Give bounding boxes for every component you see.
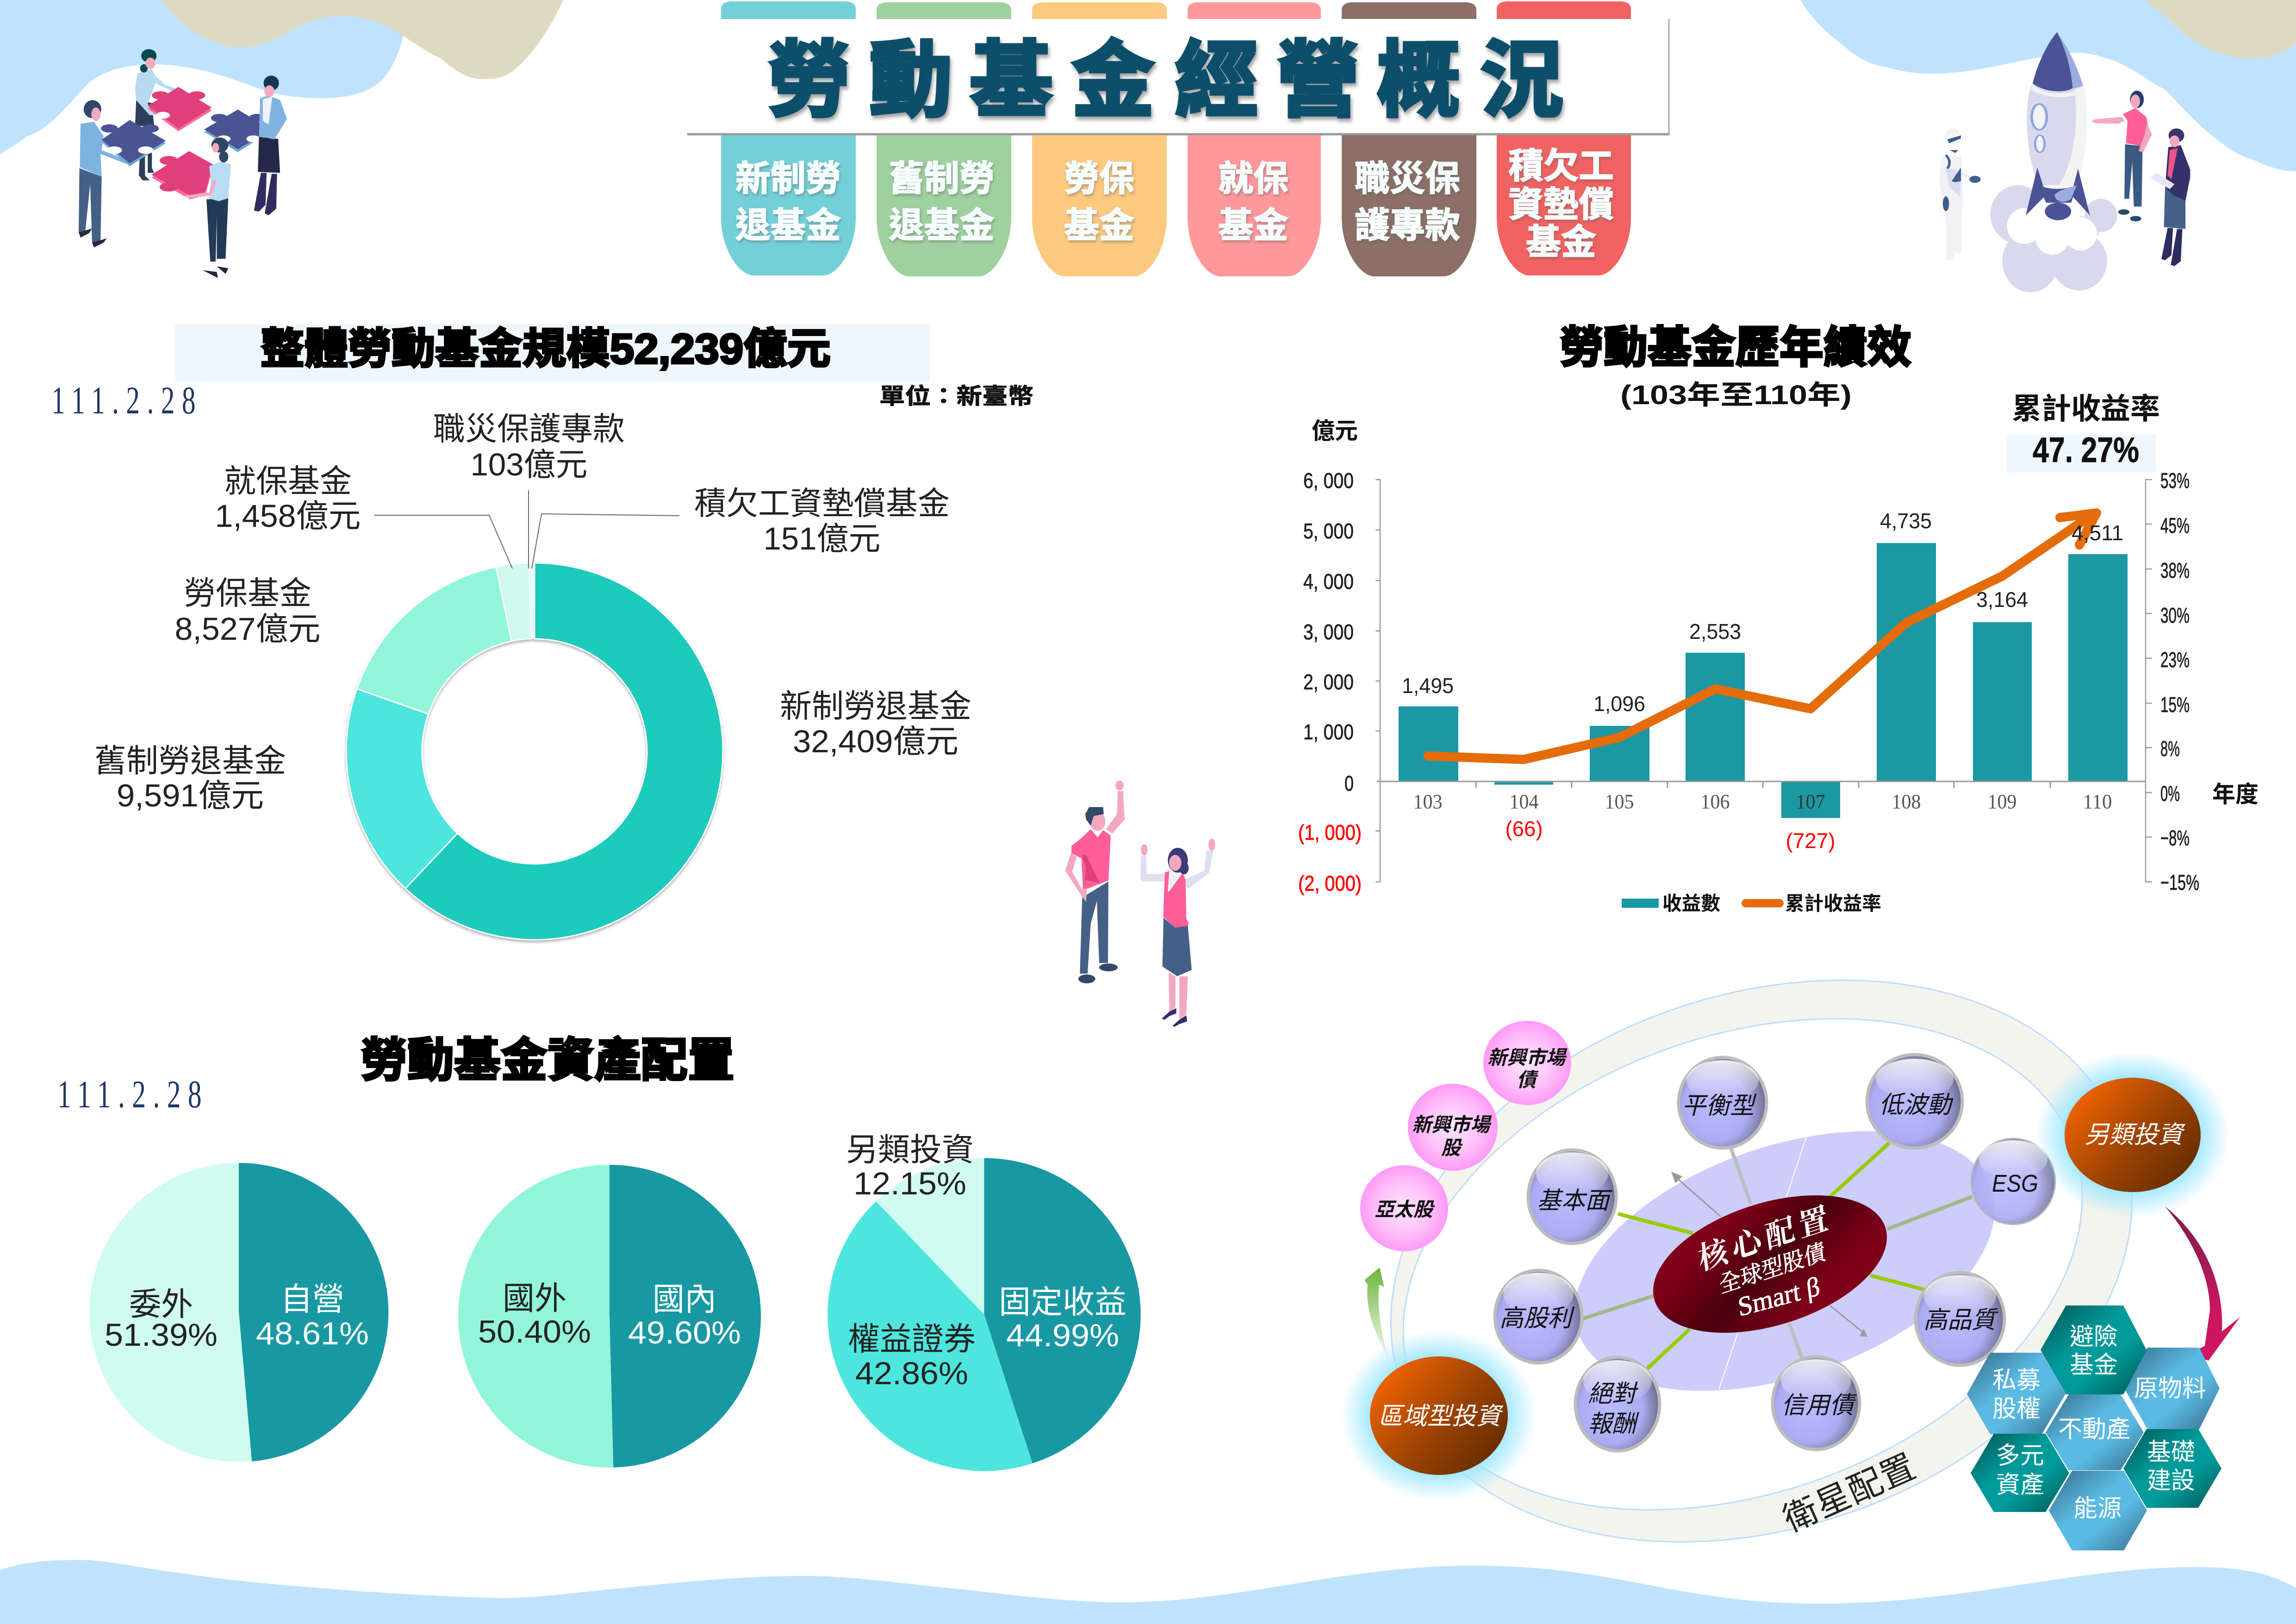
node: 另類投資 (2035, 1051, 2230, 1218)
pie: asset class: 12.15% (853, 1166, 966, 1201)
hex: 基礎建設 (2123, 1429, 2221, 1508)
right axis labels: 53% (2160, 468, 2190, 493)
header: top colour tabs (721, 1, 1631, 19)
label: 積欠工資墊償基金 (694, 486, 950, 556)
year labels: 103 (1413, 790, 1442, 813)
bubble: 高股利: 高股利 (1500, 1305, 1575, 1332)
label: 新制勞退基金: 32,409億元 (793, 724, 958, 759)
right axis labels: 23% (2160, 648, 2190, 672)
bubble: 絕對報酬: 絕對 (1588, 1380, 1639, 1407)
bubble: ESG: ESG (1992, 1170, 2038, 1197)
legend (1622, 893, 1881, 914)
label: 職災保護專款 (433, 411, 625, 482)
value labels: 4,735 (1880, 509, 1932, 533)
label: 積欠工資墊償基金: 積欠工資墊償基金 (694, 486, 950, 521)
hex: 不動產: 不動產 (2058, 1416, 2130, 1443)
hex: 私募股權: 私募 (1992, 1367, 2041, 1394)
year labels: 104 (1510, 790, 1538, 813)
cumulative return value: 47. 27% (2033, 431, 2139, 470)
year labels (1413, 790, 2112, 813)
left axis labels: 5, 000 (1303, 519, 1354, 543)
hex: 避險基金: 基金 (2070, 1352, 2118, 1379)
satellite ring (1315, 885, 2208, 1624)
date: 111.2.28 (57, 1073, 209, 1116)
bubble: 絕對報酬: 報酬 (1588, 1411, 1639, 1437)
hex: 避險基金 (2041, 1305, 2147, 1394)
date: 111.2.28 (51, 379, 203, 422)
label: 積欠工資墊償基金: 151億元 (764, 521, 880, 556)
left axis labels: 6, 000 (1303, 468, 1354, 493)
label: 職災保護專款: 103億元 (470, 447, 588, 482)
satellite hexagon cluster (1967, 1305, 2221, 1550)
right axis labels (2160, 468, 2199, 894)
pie: management: 自營 (280, 1281, 344, 1317)
chart heading: 勞動基金歷年績效 (1560, 323, 1911, 372)
regional: 亞太股 (1360, 1165, 1448, 1251)
legend: 累計收益率 (1785, 893, 1881, 914)
panel: asset allocation (57, 1035, 1141, 1471)
right axis labels: 38% (2160, 558, 2190, 582)
bubble: 平衡型 (1679, 1057, 1767, 1148)
core ellipse: 全球型股債 (1718, 1239, 1829, 1298)
fund tab: 新制勞退基金 (721, 135, 856, 275)
arrow: green up (1364, 1268, 1391, 1364)
panel heading: 整體勞動基金規模52,239億元 (261, 325, 831, 373)
fund tab: 積欠工資墊償基金: 資墊償 (1508, 185, 1614, 225)
pie: asset class (828, 1132, 1141, 1471)
ring label: 衛星配置 (1778, 1447, 1922, 1539)
fund tab: 就保基金 (1188, 135, 1321, 276)
left axis labels (1298, 468, 1362, 895)
fund tab: 舊制勞退基金: 退基金 (889, 206, 995, 245)
fund tab: 職災保護專款: 護專款 (1355, 206, 1460, 245)
illustration: two people cheering (1065, 781, 1215, 1027)
bubble: 低波動: 低波動 (1879, 1092, 1954, 1118)
hex: 基礎建設: 基礎 (2147, 1439, 2195, 1466)
value labels (1402, 509, 2123, 853)
year labels: 105 (1605, 790, 1634, 813)
small arrows (1671, 1172, 1867, 1337)
pie: management: 委外 (129, 1287, 193, 1322)
background: bottom wave (0, 1560, 2296, 1624)
label: 勞保基金: 8,527億元 (175, 611, 320, 647)
zero line (1377, 781, 2146, 788)
label: 勞保基金: 勞保基金 (184, 575, 311, 611)
hex: 能源: 能源 (2073, 1495, 2122, 1522)
bars (1399, 543, 2128, 818)
left axis labels: 3, 000 (1303, 620, 1354, 644)
panel: yearly performance (1298, 323, 2259, 914)
background: top left blobs (0, 0, 563, 154)
node: 區域型投資: 區域型投資 (1378, 1403, 1504, 1430)
bubble: 高品質: 高品質 (1923, 1307, 1999, 1334)
x axis title: 年度 (2212, 781, 2259, 807)
regional: 新興市場股: 股 (1441, 1137, 1463, 1159)
regional: 新興市場債: 債 (1517, 1069, 1539, 1091)
hex: 基礎建設: 建設 (2147, 1468, 2195, 1494)
connectors (1580, 1137, 1972, 1389)
pie: management (89, 1163, 388, 1462)
node: 區域型投資 (1341, 1330, 1537, 1501)
label: 新制勞退基金: 新制勞退基金 (780, 688, 971, 724)
legend: 收益數 (1662, 893, 1720, 914)
hex: 私募股權: 股權 (1992, 1396, 2041, 1423)
right axis labels: 8% (2160, 737, 2180, 761)
bubble: 高品質 (1916, 1273, 2004, 1365)
value labels: 3,164 (1976, 587, 2028, 612)
pie: region: 50.40% (478, 1314, 591, 1349)
cumulative return label: 累計收益率 (2012, 392, 2160, 425)
bubble: 平衡型: 平衡型 (1682, 1093, 1757, 1119)
pie: region (458, 1165, 761, 1468)
left axis labels: (2, 000) (1298, 871, 1362, 895)
bubble: 基本面: 基本面 (1537, 1187, 1613, 1214)
label: 勞保基金 (175, 575, 320, 647)
label: 舊制勞退基金 (94, 743, 286, 813)
value labels: 1,096 (1593, 692, 1645, 716)
year labels: 109 (1987, 790, 2017, 813)
cumulative return line with arrow (1428, 513, 2097, 759)
bubble: 高股利 (1495, 1270, 1582, 1363)
label: 舊制勞退基金: 舊制勞退基金 (94, 743, 286, 779)
illustration: rocket with robot and people (1939, 32, 2190, 292)
pie: management: 51.39% (105, 1317, 218, 1353)
pie: asset class: 44.99% (1006, 1318, 1119, 1353)
illustration: team with puzzle pieces (79, 49, 287, 278)
label: 就保基金: 就保基金 (224, 463, 352, 499)
pie: region: 49.60% (628, 1315, 741, 1350)
core ellipse: 核心配置 (1696, 1200, 1835, 1277)
pie: asset class: 42.86% (855, 1355, 968, 1391)
pie: asset class: 權益證券 (848, 1321, 976, 1357)
fund tab: 就保基金: 就保 (1218, 159, 1288, 199)
hex: 原物料 (2124, 1348, 2220, 1429)
pie: asset class: 固定收益 (999, 1284, 1126, 1320)
fund tab: 就保基金: 基金 (1218, 206, 1288, 245)
core ellipse (1636, 1169, 1904, 1359)
left axis labels: (1, 000) (1298, 820, 1362, 844)
right axis labels: −15% (2160, 870, 2199, 894)
fund tab: 勞保基金: 基金 (1064, 206, 1134, 245)
bubble: 信用債 (1773, 1357, 1860, 1449)
value labels: 4,511 (2072, 521, 2123, 545)
core ellipse: Smart β (1736, 1271, 1822, 1323)
regional: 新興市場債: 新興市場 (1487, 1047, 1568, 1068)
value labels: 2,553 (1689, 619, 1741, 643)
left axis labels: 1, 000 (1303, 720, 1354, 744)
panel: fund size (51, 324, 1033, 940)
year labels: 106 (1700, 790, 1730, 813)
bubble: 基本面 (1528, 1150, 1616, 1243)
pie: region: 國外 (503, 1280, 566, 1316)
left axis labels: 4, 000 (1303, 569, 1354, 593)
arrow: magenta down (2165, 1206, 2240, 1361)
fund tab: 舊制勞退基金: 舊制勞 (889, 159, 995, 199)
label: 就保基金: 1,458億元 (215, 498, 361, 534)
node: 另類投資: 另類投資 (2084, 1121, 2186, 1149)
right axis labels: 0% (2160, 781, 2180, 806)
regional: 亞太股: 亞太股 (1375, 1199, 1435, 1220)
donut chart (346, 563, 723, 940)
fund tab: 積欠工資墊償基金 (1497, 135, 1631, 275)
left unit: 億元 (1312, 418, 1358, 444)
right axis labels: 30% (2160, 603, 2190, 627)
value labels: (66) (1505, 817, 1543, 841)
panel heading box (175, 324, 930, 382)
label: 新制勞退基金 (780, 688, 971, 759)
hex: 原物料: 原物料 (2134, 1375, 2206, 1402)
fund tab: 勞保基金: 勞保 (1064, 159, 1134, 199)
fund tab: 積欠工資墊償基金: 基金 (1526, 223, 1596, 262)
hex: 多元資產: 資產 (1996, 1472, 2044, 1499)
title: 勞動基金經營概況 (767, 34, 1563, 127)
year labels: 110 (2083, 790, 2112, 813)
pie: management: 48.61% (256, 1316, 369, 1351)
leader lines (374, 490, 679, 568)
regional: 新興市場股: 新興市場 (1412, 1114, 1492, 1136)
value labels: 1,495 (1402, 674, 1454, 698)
left axis labels: 2, 000 (1303, 670, 1354, 694)
label: 職災保護專款: 職災保護專款 (433, 411, 625, 447)
regional: 新興市場債 (1483, 1021, 1571, 1105)
background: top right blobs (1800, 0, 2296, 171)
diagram: core satellite allocation (1315, 885, 2240, 1624)
hex: 不動產 (2046, 1394, 2144, 1470)
year labels: 108 (1892, 790, 1921, 813)
fund tab: 新制勞退基金: 新制勞 (735, 159, 841, 199)
fund tab: 職災保護專款 (1342, 135, 1476, 276)
bubble: 絕對報酬 (1575, 1357, 1660, 1451)
hex: 私募股權 (1967, 1353, 2066, 1434)
value labels: (727) (1786, 829, 1836, 853)
bubble: 低波動 (1867, 1055, 1962, 1148)
regional: 新興市場股 (1408, 1084, 1498, 1171)
fund tab: 職災保護專款: 職災保 (1355, 159, 1460, 199)
hex: 多元資產: 多元 (1996, 1443, 2044, 1469)
bubble: 信用債: 信用債 (1781, 1392, 1857, 1419)
hex: 能源 (2049, 1471, 2147, 1550)
label: 舊制勞退基金: 9,591億元 (117, 778, 264, 813)
lavender core disc (1541, 1081, 2028, 1441)
unit: 單位：新臺幣 (879, 384, 1033, 409)
pie: region: 國內 (653, 1281, 716, 1317)
left axis labels: 0 (1344, 771, 1354, 795)
right axis labels: 45% (2160, 513, 2190, 537)
hex: 避險基金: 避險 (2070, 1324, 2118, 1350)
hex: 多元資產 (1971, 1434, 2069, 1512)
year labels: 107 (1796, 790, 1825, 813)
fund tab: 積欠工資墊償基金: 積欠工 (1508, 147, 1614, 186)
bubble: ESG (1971, 1138, 2055, 1224)
fund tab: 勞保基金 (1032, 135, 1167, 276)
chart sub-heading: (103年至110年) (1620, 380, 1852, 410)
label: 就保基金 (215, 463, 361, 534)
right axis labels: 15% (2160, 693, 2190, 717)
axes (1375, 480, 2152, 882)
fund tab: 舊制勞退基金 (877, 135, 1011, 276)
panel heading: 勞動基金資產配置 (361, 1035, 734, 1087)
title banner frame (687, 19, 1670, 135)
pie: asset class: 另類投資 (846, 1132, 974, 1168)
right axis labels: −8% (2160, 826, 2190, 850)
fund tab: 新制勞退基金: 退基金 (735, 206, 841, 245)
